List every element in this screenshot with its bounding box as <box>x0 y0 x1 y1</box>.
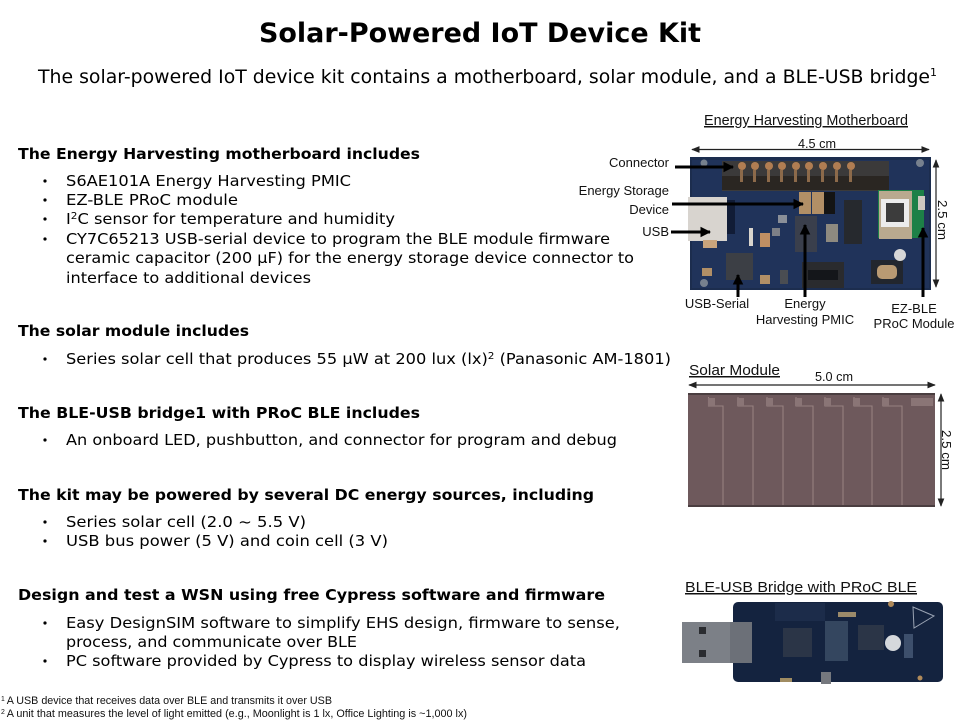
photo: motherboard <box>688 157 931 290</box>
heading: solar module panel: Solar Module <box>689 362 780 379</box>
subtitle: The solar-powered IoT device kit contains a motherboard, solar module, and a BLE-USB bridge <box>38 66 936 88</box>
text block: DC energy sources <box>18 486 594 550</box>
panel: energy harvesting motherboard <box>579 112 954 331</box>
USB serial chip <box>726 253 753 280</box>
bullet list: motherboard <box>43 172 634 287</box>
text block: solar module includes <box>18 322 671 368</box>
text block: design and test <box>18 586 620 670</box>
BLE module <box>878 190 924 238</box>
title: Solar-Powered IoT Device Kit <box>259 18 701 49</box>
bullet list: sources <box>43 513 388 550</box>
bullet list: software <box>43 614 620 670</box>
label: connector <box>609 155 733 170</box>
heading: energy sources: The kit may be powered by several DC energy sources, including <box>18 486 594 504</box>
label: energy storage device <box>579 183 803 217</box>
footnotes: 1 <box>1 696 7 703</box>
label: energy storage device: Device <box>629 202 669 217</box>
dimension: 2.5 cm solar: 2.5 cm <box>939 430 954 470</box>
text block: BLE-USB bridge includes <box>18 404 617 449</box>
footnotes <box>1 695 467 720</box>
small parts <box>760 233 770 247</box>
bullet list: sources: Series solar cell (2.0 ~ 5.5 V) <box>66 513 306 531</box>
heading: motherboard panel: Energy Harvesting Motherboard <box>704 112 908 129</box>
text block: motherboard includes <box>18 145 634 287</box>
label: EZ-BLE PRoC module <box>874 228 954 331</box>
bullet: LED: An onboard LED, pushbutton, and connector for program and debug <box>66 431 617 449</box>
label: EZ-BLE PRoC module: EZ-BLE <box>891 301 937 316</box>
dimension: 4.5 cm: 4.5 cm <box>798 136 836 151</box>
bullet list: motherboard: S6AE101A Energy Harvesting PMIC <box>66 172 351 190</box>
bullet: solar cell: (Panasonic AM-1801) <box>494 350 671 368</box>
bullet list: sources: USB bus power (5 V) and coin cell (3 V) <box>66 532 388 550</box>
bullet: solar cell <box>43 350 671 368</box>
dimension: 5.0 cm: 5.0 cm <box>815 369 853 384</box>
label: USB <box>642 224 710 239</box>
dimension: 2.5 cm solar <box>939 394 954 506</box>
heading: design: Design and test a WSN using free Cypress software and firmware <box>18 586 605 604</box>
IDC connector <box>802 262 844 288</box>
label: energy storage device: Energy Storage <box>579 183 669 198</box>
bullet list: software: PC software provided by Cypress to display wireless sensor data <box>66 652 586 670</box>
heading: bridge panel: BLE-USB Bridge with PRoC BLE <box>685 579 917 596</box>
heading: solar module: The solar module includes <box>18 322 249 340</box>
dimension: 2.5 cm <box>935 160 950 287</box>
label: connector: Connector <box>609 155 670 170</box>
label: energy harvesting PMIC: Energy <box>784 296 826 311</box>
label: USB: USB <box>642 224 669 239</box>
bullet list: motherboard: I <box>66 210 71 228</box>
panel: BLE-USB bridge <box>682 579 943 684</box>
dimension: 2.5 cm: 2.5 cm <box>935 200 950 240</box>
bullet list: motherboard: ceramic capacitor (200 µF) for the energy storage device connector to <box>66 249 634 267</box>
bullet list: motherboard: EZ-BLE PRoC module <box>66 191 238 209</box>
bullet: solar cell: Series solar cell that produces 55 µW at 200 lux (lx) <box>66 350 469 368</box>
capacitors <box>799 192 811 214</box>
USB connector <box>688 197 727 241</box>
bullet list: motherboard: CY7C65213 USB-serial device to program the BLE module firmware <box>66 230 610 248</box>
heading: motherboard: The Energy Harvesting motherboard includes <box>18 145 420 163</box>
bullet list: software: Easy DesignSIM software to simplify EHS design, firmware to sense, <box>66 614 620 632</box>
bullet list: motherboard: interface to additional devices <box>66 269 311 287</box>
footnotes: A unit that measures the level of light emitted (e.g., Moonlight is 1 lx, Office Lighting is ~1,000 lx) <box>7 708 467 720</box>
bullet list: software: process, and communicate over BLE <box>66 633 357 651</box>
heading: bridge: The BLE-USB bridge1 with PRoC BLE includes <box>18 404 420 422</box>
photo: solar cell <box>688 393 935 507</box>
panel: solar module <box>688 362 954 507</box>
inductor <box>844 200 862 244</box>
footnotes: A USB device that receives data over BLE and transmits it over USB <box>7 695 332 707</box>
pushbutton <box>871 260 903 284</box>
label: USB-Serial: USB-Serial <box>685 296 749 311</box>
photo: bridge <box>682 601 943 684</box>
subtitle: 1 <box>930 66 937 79</box>
bullet list: motherboard: 2 <box>71 211 77 222</box>
footnotes: 2 <box>1 709 7 716</box>
label: EZ-BLE PRoC module: PRoC Module <box>874 316 954 331</box>
bullet: solar cell: 2 <box>488 351 494 362</box>
bullet list: motherboard: C sensor for temperature and humidity <box>77 210 395 228</box>
label: energy harvesting PMIC <box>756 225 854 327</box>
label: USB-Serial <box>685 275 749 311</box>
header pins <box>722 161 889 191</box>
PMIC <box>795 216 817 252</box>
label: energy harvesting PMIC: Harvesting PMIC <box>756 312 854 327</box>
